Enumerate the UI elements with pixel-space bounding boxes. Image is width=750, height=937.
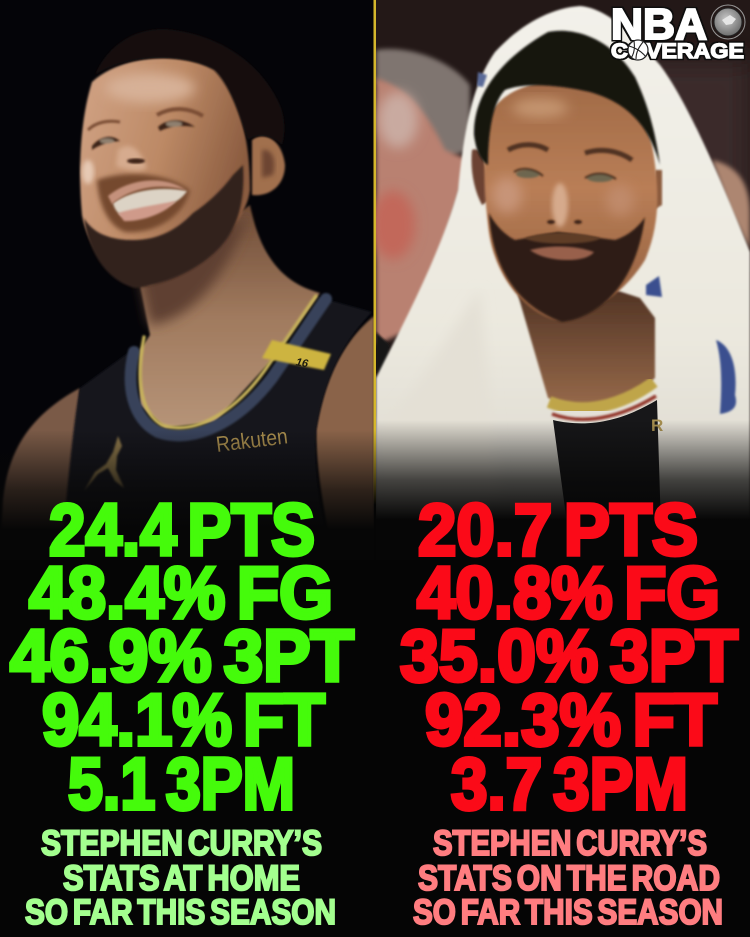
- neck and chest: [140, 205, 320, 428]
- nose: [116, 146, 147, 170]
- stat: points on the road: 20.7 PTS: [418, 490, 698, 571]
- stat: free throw on the road: 92.3% FT: [425, 680, 717, 761]
- logo word NBA: NBA: [611, 0, 707, 49]
- bottom fade of right photo: [376, 420, 750, 520]
- logo: NBA Coverage: [611, 0, 745, 63]
- stat: three point percentage at home: 46.9% 3PT: [10, 616, 354, 697]
- face: [80, 58, 250, 285]
- background person right: [712, 160, 750, 250]
- caption: home: STEPHEN CURRY’S: [41, 824, 322, 863]
- right shoulder: [315, 316, 374, 522]
- towel blue print: [716, 340, 736, 414]
- photo: Curry with towel on the road: R: [651, 416, 663, 435]
- caption: home: STATS AT HOME: [63, 859, 300, 898]
- moustache shading: [525, 233, 600, 244]
- lips: [530, 246, 594, 260]
- stat: points at home: 24.4 PTS: [49, 490, 315, 571]
- background man's hair and face: [371, 49, 470, 372]
- neck: [518, 285, 655, 405]
- jersey collar: [131, 296, 326, 435]
- Jordan logo: [86, 436, 124, 488]
- beard: [84, 165, 243, 288]
- ear: [252, 136, 285, 195]
- logo globe: [711, 5, 745, 39]
- face: [484, 80, 657, 320]
- black jersey: [66, 297, 371, 519]
- Rakuten wordmark: Rakuten: [215, 423, 289, 457]
- beard: [489, 213, 645, 322]
- caption: road: [413, 824, 723, 932]
- yellow number patch: 16: [295, 356, 310, 370]
- stat: field goal on the road: 40.8% FG: [417, 553, 720, 634]
- hair: [474, 31, 660, 165]
- yellow centre divider: [374, 0, 376, 505]
- photo: Curry with towel on the road: [371, 0, 750, 560]
- yellow number patch: [262, 340, 331, 370]
- towel: [376, 6, 750, 560]
- caption: home: SO FAR THIS SEASON: [25, 893, 336, 932]
- caption: home: [25, 824, 336, 932]
- stat: three pointers made at home: 5.1 3PM: [68, 744, 295, 825]
- eyes and brows: [508, 145, 632, 224]
- photo: Curry smiling at home: [2, 29, 374, 522]
- forehead shine: [105, 73, 195, 103]
- hair: [95, 29, 284, 145]
- jersey: [553, 400, 660, 514]
- eyes and brows: [88, 109, 203, 150]
- stats: home (green): [10, 490, 354, 825]
- stats: road (red): [400, 490, 738, 825]
- stat: free throw at home: 94.1% FT: [42, 680, 325, 761]
- smile with teeth: [113, 189, 187, 216]
- collar: [549, 382, 656, 419]
- moustache and soul patch: [97, 174, 190, 232]
- logo basketball: [628, 40, 648, 60]
- forehead shine: [512, 98, 568, 118]
- stat: three pointers made on the road: 3.7 3PM: [451, 744, 688, 825]
- bottom fade of left photo: [0, 430, 374, 530]
- left shoulder: [2, 388, 80, 520]
- logo word Coverage: COVERAGE: [611, 40, 744, 63]
- ear: [471, 149, 490, 205]
- stat: three point percentage on the road: 35.0% 3PT: [400, 616, 738, 697]
- stat: field goal at home: 48.4% FG: [29, 553, 333, 634]
